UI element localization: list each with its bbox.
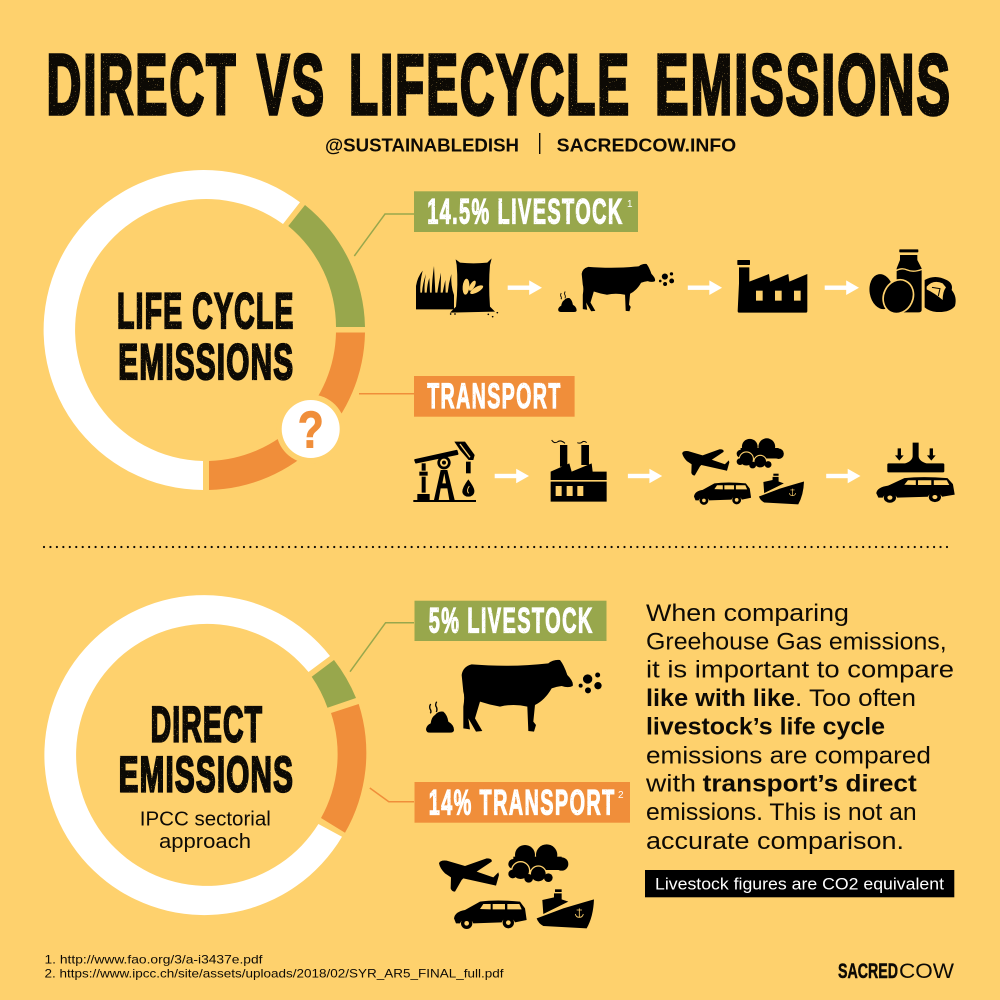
subheading: IPCC sectorial approach <box>140 809 271 853</box>
icon: plane, clouds, car and ship <box>439 844 594 929</box>
question mark badge: ? <box>298 402 324 460</box>
heading: direct emissions: EMISSIONS <box>119 747 294 803</box>
icon: grass and feed sack <box>416 258 498 317</box>
leader: transport <box>359 393 414 395</box>
text block: explanation: . Too often <box>795 685 916 712</box>
arrow <box>825 280 859 295</box>
icon: eggs, milk and meat <box>867 249 956 319</box>
label: transport: TRANSPORT <box>427 377 562 416</box>
social handles: SACREDCOW.INFO <box>557 135 736 156</box>
callout: CO2 equivalent note: Livestock figures are CO2 equivalent <box>655 876 944 894</box>
title: DIRECT <box>46 38 238 133</box>
arrow <box>628 469 662 483</box>
question mark badge <box>276 394 345 464</box>
leader: livestock <box>350 623 414 672</box>
panel: life cycle emissions <box>44 170 414 490</box>
text block: explanation: it is important to compare <box>646 657 954 684</box>
label: 14.5% livestock: 1 <box>627 199 633 210</box>
text block: explanation: When comparing <box>646 600 849 627</box>
arrow <box>508 280 542 295</box>
icon: oil pump <box>413 442 476 502</box>
label: 14% transport <box>414 782 630 823</box>
text block: explanation: Greehouse Gas emissions, <box>646 628 947 655</box>
text block: explanation: emissions. This is not an <box>646 799 917 826</box>
label: 14.5% livestock: 14.5% LIVESTOCK <box>427 192 624 232</box>
icon: refinery <box>551 440 607 502</box>
heading: life cycle emissions: EMISSIONS <box>118 334 294 390</box>
callout: CO2 equivalent note <box>645 870 954 897</box>
label: transport <box>414 376 575 417</box>
icon: plane, clouds, car and ship <box>682 438 804 505</box>
heading: direct emissions <box>119 696 294 803</box>
label: 5% livestock <box>414 601 606 641</box>
social handles <box>325 133 736 156</box>
subheading: IPCC sectorial approach: approach <box>159 831 251 853</box>
text block: explanation: accurate comparison. <box>646 828 904 855</box>
title: VS <box>257 38 326 133</box>
arrow <box>688 280 722 295</box>
icon: car under tailpipe press <box>876 443 955 503</box>
logo: Sacred Cow: COW <box>899 960 954 983</box>
social handles: @SUSTAINABLEDISH <box>325 135 519 156</box>
divider <box>44 546 948 548</box>
heading: direct emissions: DIRECT <box>151 696 263 752</box>
heading: life cycle emissions: LIFE CYCLE <box>117 283 294 339</box>
text block: explanation: livestock’s life cycle <box>646 713 885 740</box>
logo: Sacred Cow: SACRED <box>838 960 898 983</box>
footnotes <box>44 952 504 981</box>
donut: life cycle emissions <box>44 170 365 490</box>
icon: factory <box>737 260 807 313</box>
label: 14.5% livestock <box>414 191 638 232</box>
arrow <box>495 469 529 483</box>
text block: explanation <box>645 600 954 855</box>
label: 5% livestock: 5% LIVESTOCK <box>429 602 594 640</box>
icon: cow with manure and methane <box>558 264 674 312</box>
label: 14% transport: 2 <box>618 790 624 801</box>
heading: life cycle emissions <box>117 283 294 390</box>
text block: explanation: emissions are compared <box>646 742 931 769</box>
donut: direct emissions <box>44 595 366 915</box>
footnotes: 2. https://www.ipcc.ch/site/assets/uploads/2018/02/SYR_AR5_FINAL_full.pdf <box>44 967 504 981</box>
footnotes: 1. http://www.fao.org/3/a-i3437e.pdf <box>44 952 263 966</box>
subheading: IPCC sectorial approach: IPCC sectorial <box>140 809 271 831</box>
icon: cow with manure and methane <box>426 660 602 733</box>
text block: explanation: transport’s direct <box>703 771 917 798</box>
label: 14% transport: 14% TRANSPORT <box>429 784 616 822</box>
leader: transport <box>370 788 414 802</box>
arrow <box>826 469 860 483</box>
leader: livestock <box>354 214 414 256</box>
panel: direct emissions <box>44 595 414 915</box>
text block: explanation: like with like <box>646 685 795 712</box>
text block: explanation: with <box>645 771 696 798</box>
title: LIFECYCLE <box>349 38 631 133</box>
